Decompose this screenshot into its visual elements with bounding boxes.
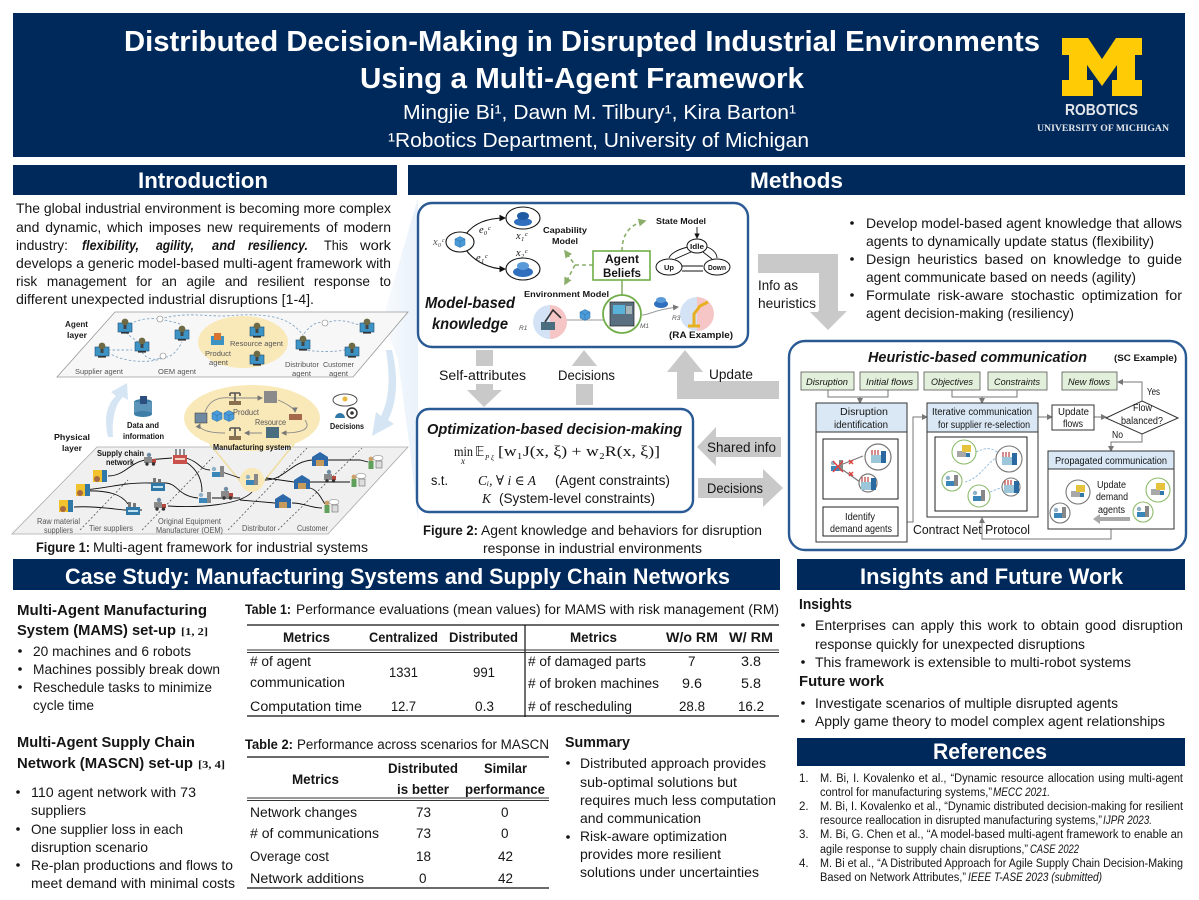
environment model: resources and machine: R3 [672, 315, 681, 322]
agent layer labels: agent [292, 369, 312, 378]
arrow: decisions right: Decisions [707, 481, 763, 496]
arrow: decisions up: Decisions [558, 368, 615, 383]
decision diamond: flow balanced: balanced? [1121, 416, 1163, 427]
table 2: Network changes [250, 805, 357, 820]
heading: case study: Case Study: Manufacturing Systems and Supply Chain Networks [65, 564, 730, 589]
input labels: New flows [1068, 377, 1110, 388]
table 1: Computation time [250, 699, 362, 714]
table 1: Distributed [449, 630, 518, 645]
state model diagram [656, 227, 730, 275]
panel: methods [408, 165, 1186, 556]
arrow: decisions down to physical layer [372, 350, 396, 436]
figure 2 caption: response in industrial environments [483, 541, 702, 556]
model-based knowledge label: Model-based [425, 295, 516, 312]
logo: University of Michigan Robotics: ROBOTICS [1065, 102, 1138, 119]
panel: case study [13, 559, 780, 891]
constraints: Cᵢ, ∀ i ∈ A [478, 473, 537, 488]
manufacturing system icons [195, 391, 307, 440]
input labels: Constraints [994, 377, 1040, 388]
methods bullet list: agents to dynamically update status (flexibility) [866, 233, 1154, 249]
figure 1 caption: Figure 1: [36, 540, 90, 555]
manufacturing system labels: Resource [255, 418, 286, 427]
table 1: communication [250, 675, 345, 690]
table 2: 18 [416, 849, 431, 864]
decision diamond: flow balanced: Flow [1133, 403, 1153, 414]
propagated communication block: Update [1097, 480, 1126, 491]
reference list [799, 773, 1184, 884]
table 1: 991 [473, 665, 495, 680]
summary: Risk-aware optimization [580, 828, 727, 844]
MAMS set-up: Machines possibly break down [33, 661, 220, 677]
MAMS set-up [17, 602, 220, 713]
propagated communication block: agents [1098, 505, 1125, 516]
physical layer labels: Distributor [242, 524, 276, 533]
objective formula: P ξ [484, 454, 494, 462]
heading: introduction: Introduction [138, 168, 268, 193]
table 2: Network additions [250, 871, 364, 886]
arrow: info as heuristics [756, 254, 847, 330]
table 2: Table 2: [245, 737, 293, 752]
update flows box [1052, 405, 1094, 430]
MASCN set-up: disruption scenario [31, 839, 148, 855]
table 2: # of communications [250, 826, 379, 841]
agent beliefs box with dashed links: Beliefs [603, 268, 641, 280]
table 2: is better [397, 782, 450, 797]
MASCN set-up: suppliers [31, 802, 86, 818]
model-based knowledge label: knowledge [432, 316, 508, 333]
manufacturing system labels: Product [233, 408, 260, 417]
reference list: M. Bi, G. Chen et al., “A model-based multi-agent framework to enable an [820, 829, 1183, 841]
methods bullet list: agent decision-making (resiliency) [866, 305, 1074, 321]
panel: introduction [12, 165, 408, 555]
diagram labels: (RA Example) [669, 330, 733, 340]
figure 2 caption [423, 523, 762, 556]
capability math labels: e₁ᶜ [476, 253, 488, 264]
introduction text: work [359, 237, 392, 253]
heading: methods: Methods [750, 168, 843, 193]
arrow: shared info [697, 427, 781, 466]
arrow: info as heuristics: Info as [758, 278, 798, 293]
agent layer resource ellipse [198, 316, 288, 368]
MASCN set-up: 110 agent network with 73 [31, 784, 196, 800]
capability math labels: x₀ᶜ [432, 237, 445, 248]
agent layer labels: Product [205, 349, 232, 358]
physical layer labels: network [106, 458, 135, 467]
methods bullet list [850, 215, 1182, 321]
figure 1 caption: Multi-agent framework for industrial systems [93, 540, 368, 555]
panel: model-based knowledge [418, 203, 748, 347]
summary [565, 735, 776, 880]
agent layer labels: Resource agent [230, 339, 284, 348]
introduction text: agility, [156, 237, 194, 253]
MAMS set-up: [1, 2] [181, 627, 208, 638]
table 2: 42 [498, 849, 513, 864]
constraints: K [481, 491, 492, 506]
update flows box: flows [1063, 419, 1083, 430]
iterative communication block [927, 403, 1038, 517]
model-based knowledge label [425, 295, 516, 333]
methods bullet list: Formulate risk-aware stochastic optimization for [866, 287, 1182, 303]
environment model: resources and machine [519, 295, 714, 339]
table 1 [245, 602, 779, 717]
diagram labels [524, 216, 733, 340]
agent layer labels: agent [329, 369, 349, 378]
logo: University of Michigan Robotics [1037, 38, 1169, 134]
reference list: M. Bi, I. Kovalenko et al., “Dynamic distributed decision-making for resilient [820, 801, 1184, 813]
arrow: self-attributes [437, 350, 528, 407]
MAMS set-up: Reschedule tasks to minimize [33, 679, 212, 695]
table 1: 0.3 [475, 699, 494, 714]
table 2: 0 [419, 871, 427, 886]
physical layer labels: Decisions [330, 422, 364, 431]
table 2 [245, 737, 549, 888]
table 2: Performance across scenarios for MASCN [297, 737, 549, 752]
figure 2 caption: Agent knowledge and behaviors for disruption [481, 523, 762, 538]
physical layer labels: suppliers [44, 526, 73, 535]
state model diagram: Up [664, 263, 674, 272]
MASCN set-up: Re-plan productions and flows to [31, 857, 233, 873]
reference list: 4. [799, 858, 809, 870]
summary: Distributed approach provides [580, 755, 766, 771]
icon: decisions cloud and target [333, 394, 357, 418]
contract net protocol text: Contract Net Protocol [913, 523, 1030, 537]
physical layer labels: Data and [127, 421, 159, 430]
insights list [799, 596, 1183, 670]
table 1: 12.7 [391, 699, 416, 714]
physical layer labels: layer [62, 443, 83, 453]
MAMS set-up: Multi-Agent Manufacturing [17, 602, 207, 619]
table 1: Table 1: [245, 602, 291, 617]
insights list: response quickly for unexpected disruptions [815, 636, 1085, 652]
reference list: IJPR 2023. [1103, 815, 1152, 827]
introduction text: and dynamic, which imposes new requirements of modern [16, 219, 391, 235]
table 1: Metrics [570, 630, 617, 645]
table 2: Similar [484, 761, 528, 776]
MASCN set-up: Multi-Agent Supply Chain [17, 734, 195, 751]
diagram labels: Capability [543, 225, 587, 235]
constraints [431, 473, 670, 506]
agent layer labels: Supplier agent [75, 367, 124, 376]
table 1: # of rescheduling [528, 699, 632, 714]
diagram labels: Model [552, 236, 578, 246]
disruption identification block: demand agents [830, 524, 892, 535]
arrow: data up to agent layer [106, 383, 128, 437]
table 2: Distributed [388, 761, 458, 776]
iterative communication block: Iterative communication [932, 407, 1032, 418]
propagated communication block: demand [1096, 492, 1128, 503]
optimization title: Optimization-based decision-making [427, 421, 682, 438]
diagram labels: Environment Model [524, 289, 609, 299]
introduction text: This [324, 237, 348, 253]
disruption identification block: Identify [845, 512, 875, 523]
heuristic title: (SC Example) [1114, 353, 1177, 364]
reference list: resource reallocation in disrupted manufacturing systems,” [820, 815, 1102, 827]
poster title: Distributed Decision-Making in Disrupted Industrial Environments [124, 26, 1040, 58]
table 1: 28.8 [679, 699, 705, 714]
introduction text: risk management for an agile and resilient response to [16, 273, 391, 289]
logo: University of Michigan Robotics: UNIVERSITY OF MICHIGAN [1037, 124, 1169, 134]
insights list: Insights [799, 596, 852, 613]
arrow: decisions up [556, 350, 617, 405]
input labels [806, 377, 1110, 388]
introduction text [16, 200, 392, 307]
introduction text: and [212, 237, 235, 253]
reference list: MECC 2021. [993, 787, 1050, 799]
table 1: # of agent [250, 654, 311, 669]
table 2: performance [465, 782, 545, 797]
insights list: This framework is extensible to multi-robot systems [815, 654, 1131, 670]
table 1: W/ RM [729, 630, 773, 645]
panel: heuristic-based communication [789, 341, 1186, 550]
reference list: 1. [799, 773, 809, 785]
summary: Summary [565, 735, 630, 751]
icon: data and information database [134, 396, 152, 417]
environment model: resources and machine: M1 [640, 323, 649, 330]
physical layer plane [12, 447, 408, 534]
reference list: agile response to supply chain disruptions,” [820, 844, 1028, 856]
reference list: control for manufacturing systems,” [820, 787, 992, 799]
objective formula: min [454, 445, 473, 460]
agent layer labels: Agent [65, 319, 88, 329]
insights list: Enterprises can apply this work to obtain good disruption [815, 617, 1183, 633]
disruption identification block: identification [834, 420, 888, 431]
propagated communication block [1048, 451, 1174, 529]
physical layer labels: Original Equipment [158, 517, 222, 526]
physical layer labels: Physical [54, 432, 90, 442]
agent layer labels: Customer [323, 360, 354, 369]
propagated communication block: Propagated communication [1055, 456, 1167, 467]
disruption identification block [816, 403, 907, 542]
constraints: (Agent constraints) [555, 473, 670, 488]
constraints: (System-level constraints) [499, 491, 655, 506]
heading: methods [408, 165, 1185, 195]
figure 1: multi-agent framework diagram [12, 312, 408, 535]
methods bullet list: Design heuristics based on knowledge to guide [866, 251, 1182, 267]
table 1: # of damaged parts [528, 654, 646, 669]
summary: sub-optimal solutions but [580, 774, 737, 790]
capability state graph [446, 207, 540, 280]
MASCN set-up: [3, 4] [198, 760, 225, 771]
introduction text: different unexpected industrial disruptions [1-4]. [16, 291, 314, 307]
future work list [799, 673, 1165, 729]
physical layer labels: Supply chain [97, 449, 144, 458]
table 1: 7 [688, 654, 696, 669]
table 1: 16.2 [738, 699, 764, 714]
manufacturing system ellipse [184, 385, 320, 451]
table 1: # of broken machines [528, 676, 659, 691]
constraints: s.t. [431, 473, 448, 488]
objective formula: 𝔼 [475, 445, 484, 460]
background wedge [383, 198, 418, 520]
manufacturing system labels: Manufacturing system [213, 443, 291, 452]
summary: provides more resilient [580, 846, 721, 862]
agent layer labels: layer [67, 330, 88, 340]
decision diamond: flow balanced: Yes [1147, 387, 1160, 398]
table 1: 5.8 [741, 676, 761, 691]
table 1: Performance evaluations (mean values) for MAMS with risk management (RM) [296, 602, 779, 617]
agent layer labels: OEM agent [158, 367, 197, 376]
table 2: 42 [498, 871, 513, 886]
agent layer labels [65, 319, 354, 378]
supply chain node icons [59, 449, 383, 515]
table 1: Centralized [369, 630, 438, 645]
panel: insights and future work [797, 559, 1185, 729]
MAMS set-up: System (MAMS) set-up [17, 622, 176, 639]
reference list: M. Bi et al., “A Distributed Approach for Agile Supply Chain Decision-Making [820, 858, 1183, 870]
table 1: 3.8 [741, 654, 761, 669]
heading: insights and future work: Insights and Future Work [860, 564, 1124, 589]
reference list: M. Bi, I. Kovalenko et al., “Dynamic resource allocation using multi-agent [820, 773, 1184, 785]
connector from physical ellipse to hub [210, 444, 294, 486]
table 1: Metrics [283, 630, 330, 645]
capability math labels [432, 225, 528, 264]
physical layer labels [37, 421, 364, 535]
physical layer labels: Manufacturer (OEM) [156, 526, 223, 535]
future work list: Apply game theory to model complex agent relationships [815, 713, 1165, 729]
introduction text: The global industrial environment is becoming more complex [16, 200, 391, 216]
agent beliefs box with dashed links [565, 221, 650, 296]
heading: references: References [933, 739, 1047, 764]
agent layer network [95, 315, 374, 366]
panel: references [797, 738, 1185, 884]
MAMS set-up: cycle time [33, 697, 94, 713]
reference list: 3. [799, 829, 809, 841]
introduction text: resiliency. [248, 237, 308, 253]
objective formula: [w₁J(x, ξ) + w₂R(x, ξ)] [498, 444, 660, 460]
agent layer plane [57, 312, 408, 377]
physical layer labels: Tier suppliers [89, 524, 133, 533]
capability math labels: e₀ᶜ [479, 225, 491, 236]
iterative communication block: for supplier re-selection [938, 420, 1030, 431]
arrow: update: Update [709, 367, 753, 382]
heuristic title: Heuristic-based communication [868, 349, 1087, 366]
physical layer labels: information [123, 432, 164, 441]
introduction text: develops a generic model-based multi-agent framework with [16, 255, 391, 271]
agent beliefs box with dashed links: Agent [605, 254, 639, 266]
future work list: Future work [799, 673, 885, 690]
input boxes [801, 372, 1117, 390]
poster title [124, 26, 1040, 95]
state model diagram: Idle [690, 242, 704, 251]
decision diamond: flow balanced: No [1112, 430, 1123, 441]
objective formula: x [460, 456, 465, 466]
future work list: Investigate scenarios of multiple disrupted agents [815, 695, 1118, 711]
summary: and communication [580, 810, 701, 826]
MASCN set-up: Network (MASCN) set-up [17, 755, 193, 772]
input labels: Objectives [931, 377, 973, 388]
environment model: resources and machine: R1 [519, 325, 528, 332]
heading: insights and future work [797, 559, 1185, 590]
arrow: decisions right [698, 469, 783, 507]
authors and affiliation [388, 102, 809, 152]
MASCN set-up [16, 734, 235, 891]
poster title: Using a Multi-Agent Framework [360, 63, 805, 95]
arrow: shared info: Shared info [707, 440, 776, 455]
decision diamond: flow balanced [1106, 387, 1178, 441]
MASCN set-up: One supplier loss in each [31, 821, 183, 837]
methods bullet list: Develop model-based agent knowledge that allows [866, 215, 1182, 231]
reference list: 2. [799, 801, 809, 813]
disruption identification block: Disruption [840, 407, 888, 418]
summary: solutions under uncertainties [580, 864, 759, 880]
manufacturing system labels [213, 408, 291, 452]
summary: requires much less computation [580, 792, 776, 808]
arrow: update [667, 350, 779, 399]
figure 2 caption: Figure 2: [423, 523, 478, 538]
agent layer labels: Distributor [285, 360, 319, 369]
arrow: self-attributes: Self-attributes [439, 368, 526, 383]
authors and affiliation: ¹Robotics Department, University of Michigan [388, 130, 809, 152]
table 1: 9.6 [682, 676, 702, 691]
table 2: Metrics [292, 772, 339, 787]
objective formula [454, 444, 660, 466]
table 2: Overage cost [250, 849, 329, 864]
capability math labels: x₁ᶜ [515, 231, 528, 242]
title banner [13, 13, 1185, 157]
table 1: W/o RM [666, 630, 718, 645]
MASCN set-up: meet demand with minimal costs [31, 875, 235, 891]
agent layer labels: agent [209, 358, 229, 367]
heading: introduction [13, 165, 397, 195]
methods bullet list: agent communicate based on needs (agility) [866, 269, 1136, 285]
reference list: IEEE T-ASE 2023 (submitted) [968, 872, 1102, 884]
capability math labels: x₂ᶜ [515, 248, 528, 259]
input labels: Disruption [806, 377, 848, 388]
reference list: CASE 2022 [1030, 844, 1079, 856]
supply chain network flows [74, 458, 368, 510]
update flows box: Update [1058, 407, 1089, 418]
diagram labels: State Model [656, 216, 706, 226]
physical layer labels: Customer [297, 524, 328, 533]
table 1: 1331 [389, 665, 418, 680]
table 2: 73 [416, 805, 431, 820]
reference list: Based on Network Attributes,” [820, 872, 966, 884]
input labels: Initial flows [866, 377, 913, 388]
table 2: 73 [416, 826, 431, 841]
table 2: 0 [501, 826, 509, 841]
connectors [828, 382, 1142, 539]
authors and affiliation: Mingjie Bi¹, Dawn M. Tilbury¹, Kira Barton¹ [403, 102, 796, 124]
introduction text: flexibility, [82, 237, 139, 253]
physical layer labels: Raw material [37, 517, 80, 526]
table 2: 0 [501, 805, 509, 820]
state model diagram: Down [708, 263, 726, 272]
MAMS set-up: 20 machines and 6 robots [33, 643, 191, 659]
arrow: info as heuristics: heuristics [758, 296, 816, 311]
panel: optimization-based decision-making [417, 409, 693, 512]
heading: references [797, 738, 1185, 766]
introduction text: industry: [16, 237, 68, 253]
